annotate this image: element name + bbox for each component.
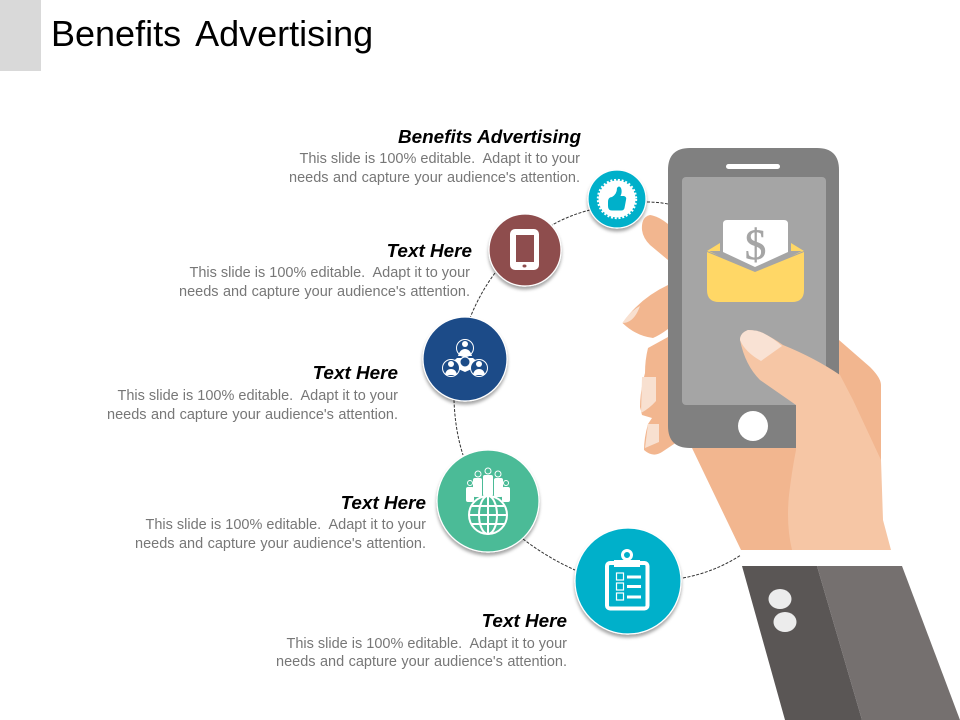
text block: node 4	[135, 493, 426, 552]
text block: Benefits Advertising: This slide is 100% editable. Adapt it to your	[300, 151, 580, 167]
text block: node 3	[107, 363, 398, 423]
text block: node 4: Text Here	[341, 493, 426, 514]
thumb and wrist	[740, 330, 891, 550]
phone home button	[738, 411, 768, 441]
title: Benefits Advertising	[51, 13, 373, 54]
back fingers	[642, 215, 668, 260]
text block: node 5: Text Here	[482, 611, 567, 632]
sleeve	[742, 566, 960, 720]
text block: node 2: This slide is 100% editable. Adapt it to your	[190, 265, 470, 281]
hand illustration	[622, 148, 891, 550]
icon: people on globe	[466, 468, 510, 534]
thumbnail	[740, 330, 782, 361]
text block: node 5: This slide is 100% editable. Adapt it to your	[286, 636, 567, 652]
phone speaker	[726, 164, 780, 169]
node: thumbs up	[588, 170, 646, 228]
phone	[668, 148, 839, 448]
icon: connected people	[442, 340, 488, 376]
dashed connector arc	[454, 202, 741, 578]
text block: node 4: This slide is 100% editable. Adapt it to your	[146, 517, 426, 533]
palm	[692, 340, 881, 550]
text block: node 5	[276, 611, 567, 670]
icon: thumbs up badge	[598, 180, 636, 218]
text block: Benefits Advertising	[289, 127, 581, 186]
text block: node 4: needs and capture your audience's attention.	[135, 536, 426, 552]
node: team network	[423, 317, 507, 401]
icon: envelope with dollar	[707, 220, 804, 302]
text block: node 3: This slide is 100% editable. Adapt it to your	[118, 388, 398, 404]
icon: tablet	[510, 229, 539, 270]
node: global people	[437, 450, 539, 552]
text block: Benefits Advertising: Benefits Advertising	[398, 127, 581, 148]
node: checklist	[575, 528, 681, 634]
text block: node 3: needs and capture your audience's attention.	[107, 407, 398, 423]
text block: node 5: needs and capture your audience's attention.	[276, 654, 567, 670]
node: mobile	[489, 214, 561, 286]
cuff buttons	[768, 589, 792, 609]
text block: node 2: Text Here	[387, 241, 472, 262]
phone screen	[682, 177, 826, 405]
fingernails	[641, 377, 656, 413]
icon: clipboard	[607, 550, 648, 608]
text block: node 2	[179, 241, 472, 300]
icon: envelope with dollar: $	[745, 222, 766, 269]
text block: node 3: Text Here	[313, 363, 398, 384]
title accent block	[0, 0, 41, 71]
text block: node 2: needs and capture your audience's attention.	[179, 284, 470, 300]
text block: Benefits Advertising: needs and capture your audience's attention.	[289, 170, 580, 186]
